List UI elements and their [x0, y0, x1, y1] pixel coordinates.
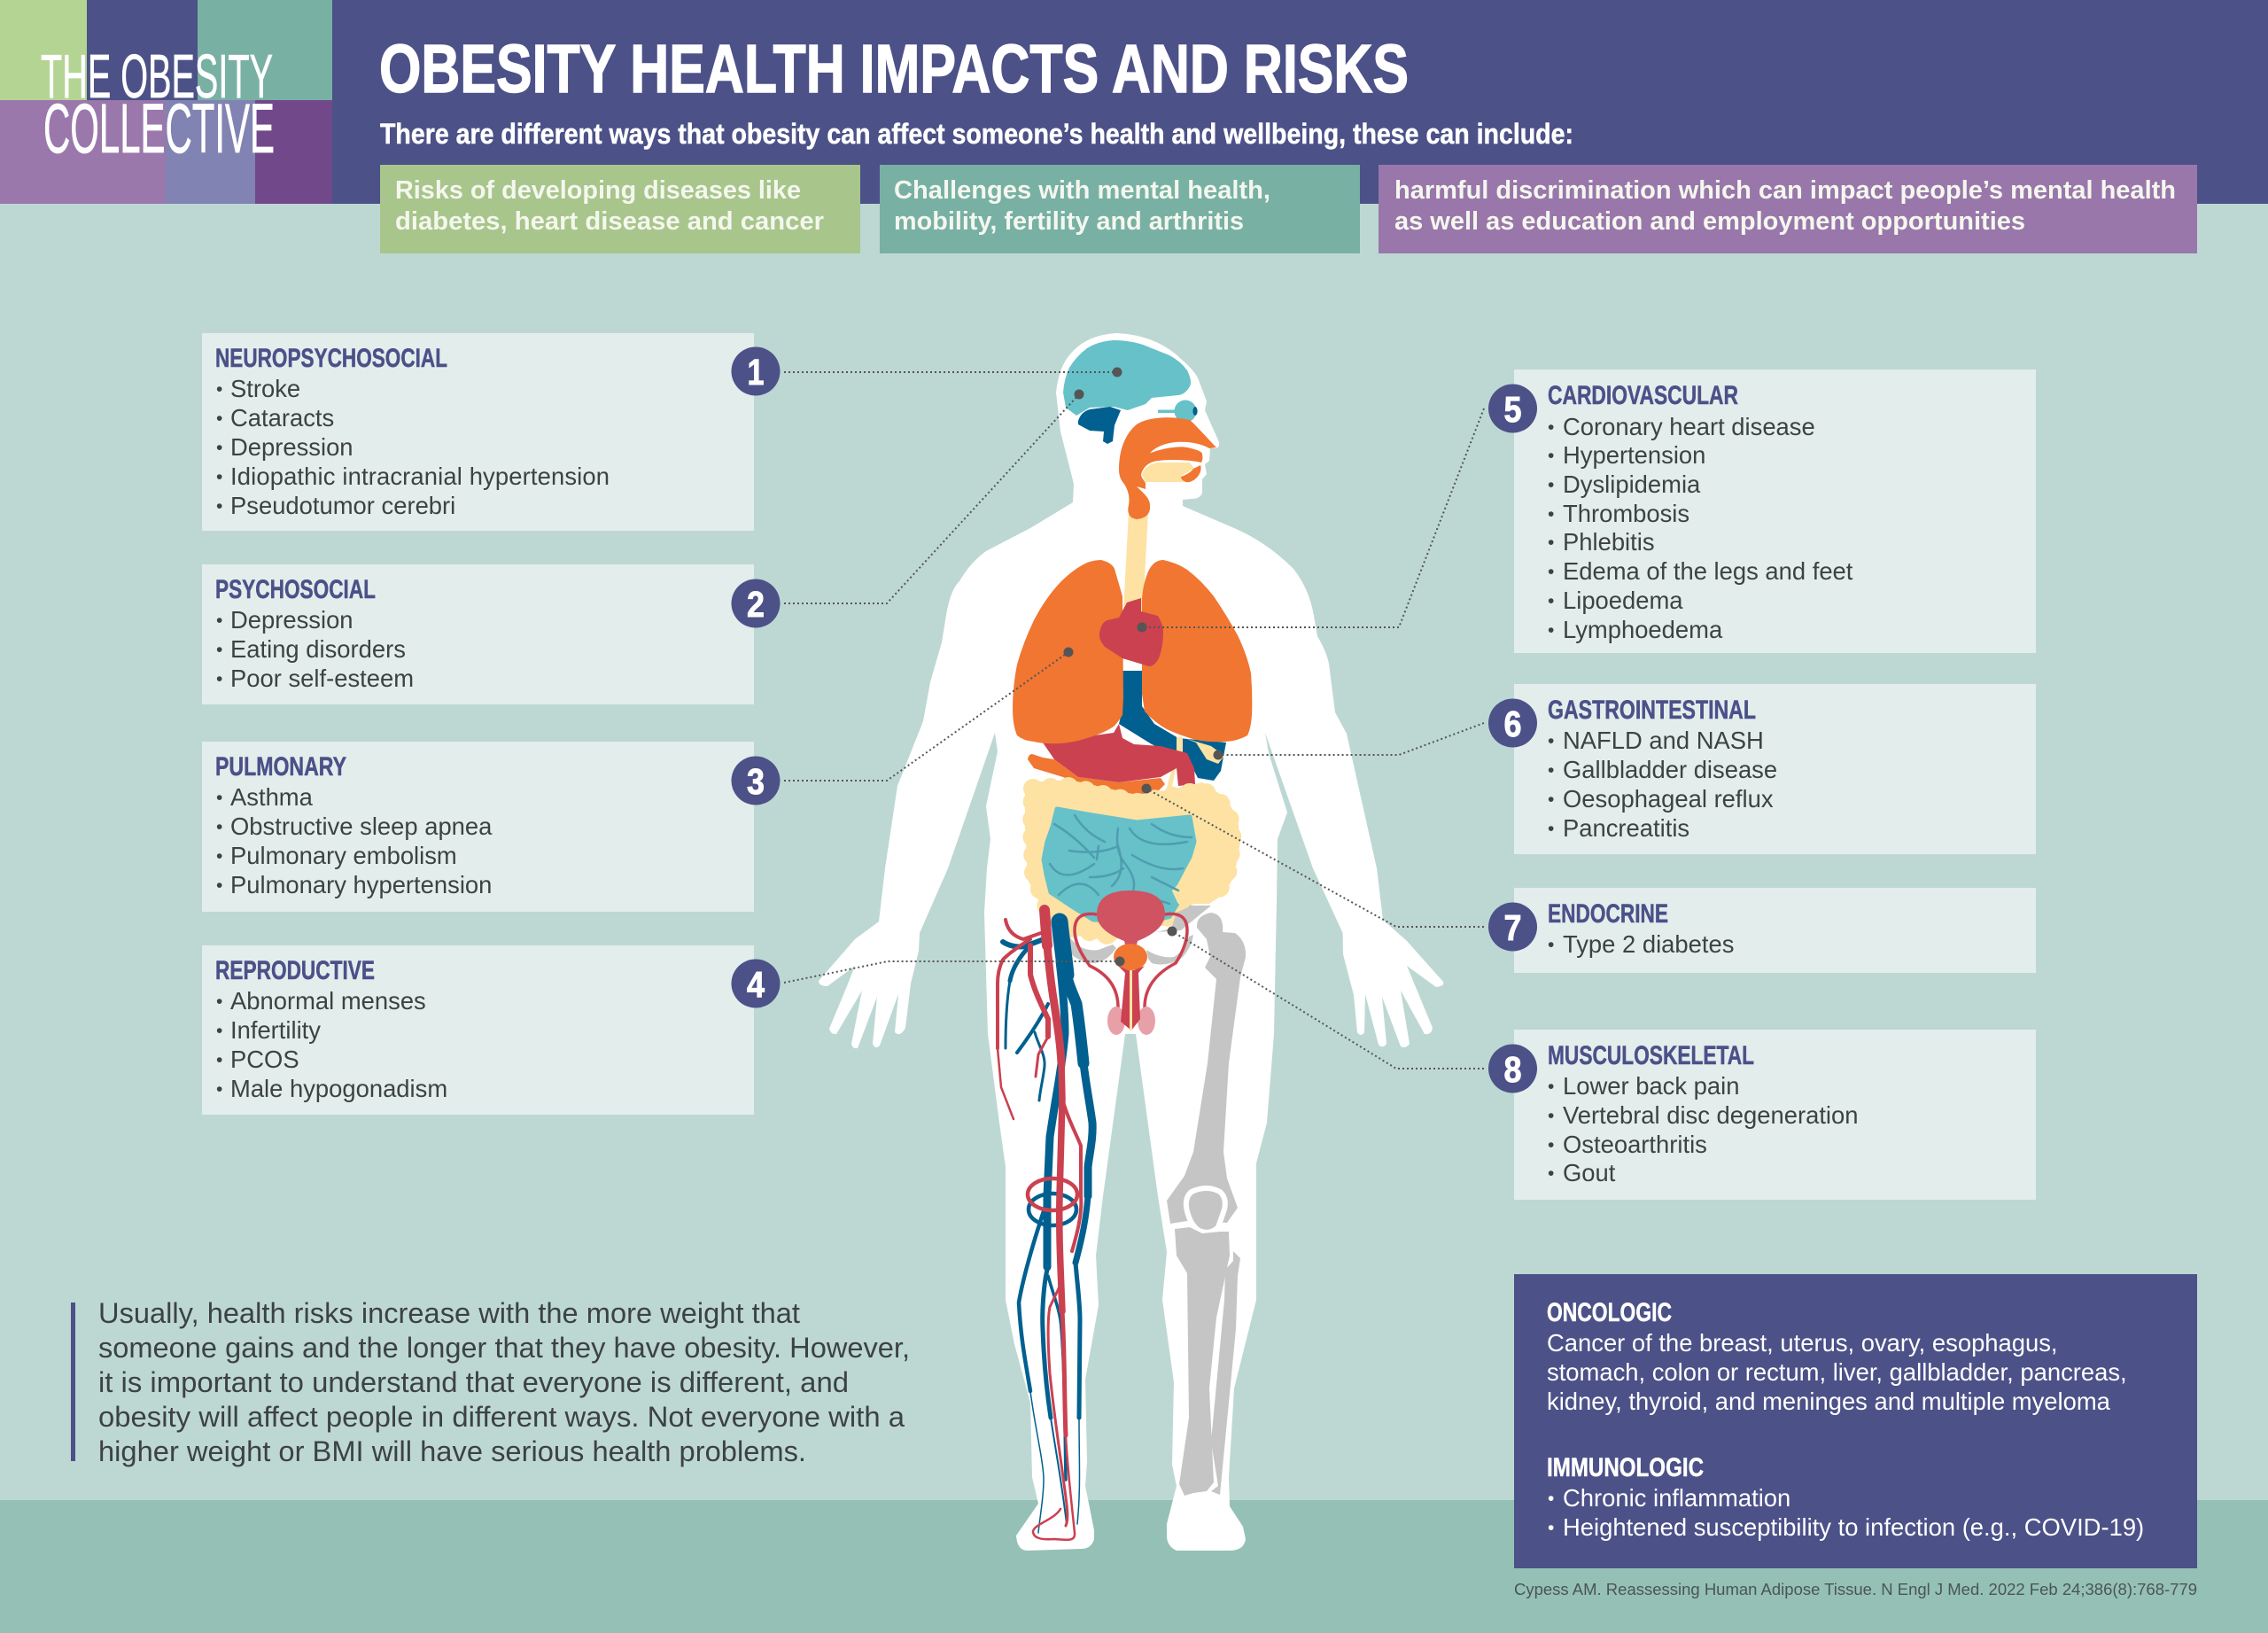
number badge 7: [1488, 902, 1537, 952]
cerebellum: [1078, 407, 1121, 444]
panel: psychosocial: Depression: [230, 606, 353, 634]
panel: oncologic and immunologic: [1514, 1274, 2197, 1568]
panel: neuropsychosocial: •: [216, 496, 222, 517]
panel: pulmonary: •: [216, 788, 222, 808]
panel: cardiovascular: •: [1548, 446, 1554, 466]
nasal and oral cavity: [1119, 417, 1216, 519]
panel: endocrine: •: [1548, 935, 1554, 955]
panel: pulmonary: •: [216, 846, 222, 867]
panel: pulmonary: •: [216, 817, 222, 837]
panel: cardiovascular: •: [1548, 591, 1554, 611]
number badge 6: 6: [1504, 704, 1522, 744]
panel: oncologic and immunologic: Chronic inflammation: [1563, 1484, 1790, 1512]
panel: neuropsychosocial: Stroke: [230, 375, 300, 402]
panel: endocrine: [1514, 888, 2036, 973]
panel: cardiovascular: •: [1548, 620, 1554, 641]
panel: gastrointestinal: Pancreatitis: [1563, 814, 1689, 842]
panel: gastrointestinal: Gallbladder disease: [1563, 756, 1777, 783]
human body figure: [819, 333, 1443, 1551]
panel: neuropsychosocial: •: [216, 379, 222, 400]
panel: reproductive: REPRODUCTIVE: [215, 956, 375, 985]
panel: oncologic and immunologic: •: [1548, 1518, 1554, 1538]
text block: health risk note: it is important to understand that everyone is different, and: [98, 1366, 849, 1398]
text block: health risk note: someone gains and the longer that they have obesity. However,: [98, 1332, 910, 1364]
panel: cardiovascular: •: [1548, 475, 1554, 495]
panel: musculoskeletal: •: [1548, 1163, 1554, 1184]
lip: [1181, 465, 1201, 482]
panel: reproductive: Male hypogonadism: [230, 1075, 447, 1102]
panel: cardiovascular: •: [1548, 562, 1554, 582]
subtitle: There are different ways that obesity can affect someone’s health and wellbeing, these can include:: [380, 118, 1573, 150]
callout: mental health and mobility: Challenges with mental health,: [894, 176, 1270, 205]
callout: discrimination: harmful discrimination which can impact people’s mental health: [1394, 176, 2176, 205]
panel: musculoskeletal: •: [1548, 1077, 1554, 1097]
number badge 2: 2: [747, 584, 765, 625]
panel: gastrointestinal: •: [1548, 789, 1554, 810]
panel: psychosocial: •: [216, 640, 222, 660]
heart: [1099, 598, 1163, 666]
panel: cardiovascular: Dyslipidemia: [1563, 470, 1701, 498]
femur: [1167, 913, 1246, 1224]
panel: cardiovascular: Thrombosis: [1563, 500, 1689, 527]
panel: reproductive: •: [216, 1050, 222, 1070]
panel: cardiovascular: CARDIOVASCULAR: [1548, 381, 1738, 410]
number badge 6: [1488, 698, 1537, 748]
panel: oncologic and immunologic: •: [1548, 1489, 1554, 1509]
panel: musculoskeletal: •: [1548, 1135, 1554, 1155]
panel: psychosocial: PSYCHOSOCIAL: [215, 575, 376, 604]
panel: oncologic and immunologic: stomach, colon or rectum, liver, gallbladder, pancreas,: [1547, 1358, 2127, 1386]
stomach: [1043, 724, 1195, 786]
header band: [332, 0, 2268, 204]
pelvis: [1061, 906, 1211, 965]
large intestine fill: [1025, 780, 1240, 942]
panel: psychosocial: Eating disorders: [230, 635, 406, 663]
leader line 1 to brain: [784, 367, 1122, 377]
eye: [1158, 400, 1198, 422]
panel: pulmonary: Asthma: [230, 783, 314, 811]
left lung: [1013, 560, 1123, 743]
number badge 5: 5: [1504, 389, 1522, 430]
panel: gastrointestinal: •: [1548, 760, 1554, 781]
panel: reproductive: [202, 945, 754, 1115]
panel: psychosocial: •: [216, 610, 222, 631]
panel: cardiovascular: Coronary heart disease: [1563, 413, 1815, 440]
body silhouette: [819, 333, 1443, 1551]
trachea: [1123, 512, 1148, 611]
leader line 3 to lung: [784, 647, 1074, 781]
panel: cardiovascular: Lymphoedema: [1563, 616, 1723, 643]
gallbladder: [1166, 737, 1224, 791]
panel: gastrointestinal: [1514, 684, 2036, 854]
panel: musculoskeletal: Vertebral disc degeneration: [1563, 1101, 1858, 1129]
panel: reproductive: •: [216, 1079, 222, 1100]
leg veins: [1003, 921, 1092, 1533]
ground band: [0, 1500, 2268, 1633]
tibia: [1175, 1227, 1230, 1496]
panel: neuropsychosocial: •: [216, 438, 222, 458]
number badge 3: [732, 757, 780, 805]
leader line 4 to prostate: [784, 957, 1125, 983]
panel: neuropsychosocial: Idiopathic intracranial hypertension: [230, 463, 610, 490]
text block: health risk note: Usually, health risks increase with the more weight that: [98, 1297, 800, 1329]
panel: neuropsychosocial: Pseudotumor cerebri: [230, 492, 455, 519]
callout: disease risks: Risks of developing diseases like: [395, 176, 801, 205]
panel: neuropsychosocial: •: [216, 408, 222, 429]
urethra: [1130, 970, 1132, 1030]
number badge 4: [732, 959, 780, 1008]
panel: neuropsychosocial: Depression: [230, 433, 353, 461]
brain: [1063, 340, 1191, 416]
large intestine bumps: [1032, 787, 1232, 935]
panel: pulmonary: Obstructive sleep apnea: [230, 813, 493, 840]
number badge 1: [732, 347, 780, 395]
patella: [1186, 1188, 1225, 1233]
panel: cardiovascular: •: [1548, 417, 1554, 438]
testes: [1107, 1007, 1155, 1035]
panel: musculoskeletal: Lower back pain: [1563, 1072, 1739, 1100]
leader line 7 to pancreas: [1141, 783, 1484, 927]
panel: gastrointestinal: Oesophageal reflux: [1563, 785, 1774, 813]
panel: endocrine: Type 2 diabetes: [1563, 930, 1734, 958]
panel: psychosocial: Poor self-esteem: [230, 665, 414, 692]
panel: cardiovascular: •: [1548, 504, 1554, 525]
small intestine: [1044, 809, 1194, 921]
panel: cardiovascular: Lipoedema: [1563, 587, 1683, 614]
panel: pulmonary: •: [216, 875, 222, 896]
leg arteries: [998, 910, 1081, 1540]
panel: neuropsychosocial: [202, 333, 754, 531]
panel: neuropsychosocial: •: [216, 467, 222, 487]
prostate: [1114, 944, 1147, 970]
panel: neuropsychosocial: Cataracts: [230, 404, 334, 432]
panel: musculoskeletal: Osteoarthritis: [1563, 1131, 1707, 1158]
logo: The Obesity Collective: [0, 0, 332, 204]
panel: gastrointestinal: •: [1548, 819, 1554, 839]
panel: musculoskeletal: •: [1548, 1106, 1554, 1126]
callout: disease risks: diabetes, heart disease and cancer: [395, 207, 824, 236]
tongue: [1142, 463, 1194, 482]
citation: Cypess AM. Reassessing Human Adipose Tissue. N Engl J Med. 2022 Feb 24;386(8):768-779: [1514, 1580, 2197, 1598]
panel: reproductive: •: [216, 991, 222, 1012]
panel: gastrointestinal: •: [1548, 731, 1554, 751]
panel: oncologic and immunologic: Heightened susceptibility to infection (e.g., COVID-19): [1563, 1513, 2144, 1541]
number badge 1: 1: [748, 352, 764, 393]
right lung: [1142, 560, 1252, 742]
text block: health risk note: higher weight or BMI will have serious health problems.: [98, 1435, 806, 1467]
panel: oncologic and immunologic: Cancer of the breast, uterus, ovary, esophagus,: [1547, 1329, 2058, 1357]
panel: cardiovascular: Hypertension: [1563, 441, 1705, 469]
vas deferens: [1075, 914, 1187, 1007]
penis: [1118, 966, 1145, 1030]
text block: health risk note: obesity will affect people in different ways. Not everyone with a: [98, 1401, 905, 1433]
number badge 5: [1488, 385, 1537, 432]
title: OBESITY HEALTH IMPACTS AND RISKS: [379, 31, 1409, 107]
liver: [1028, 754, 1165, 796]
panel: pulmonary: [202, 742, 754, 912]
panel: musculoskeletal: [1514, 1030, 2036, 1200]
number badge 4: 4: [747, 964, 765, 1005]
panel: psychosocial: [202, 564, 754, 704]
panel: endocrine: ENDOCRINE: [1548, 899, 1668, 929]
panel: reproductive: PCOS: [230, 1046, 299, 1073]
panel: pulmonary: PULMONARY: [215, 752, 346, 782]
panel: pulmonary: Pulmonary embolism: [230, 842, 457, 869]
panel: reproductive: •: [216, 1021, 222, 1041]
panel: cardiovascular: Edema of the legs and feet: [1563, 557, 1853, 585]
panel: oncologic and immunologic: ONCOLOGIC: [1547, 1298, 1672, 1327]
leader line 5 to heart: [1138, 408, 1484, 633]
panel: reproductive: Infertility: [230, 1016, 321, 1044]
panel: oncologic and immunologic: IMMUNOLOGIC: [1547, 1453, 1704, 1482]
number badge 3: 3: [747, 761, 765, 802]
panel: musculoskeletal: Gout: [1563, 1159, 1616, 1186]
vena cava and liver: [1119, 671, 1226, 781]
descending colon tail: [1174, 906, 1192, 930]
text block: health risk note: [71, 1297, 910, 1467]
panel: cardiovascular: [1514, 369, 2036, 653]
number badge 8: [1488, 1044, 1537, 1093]
logo: The Obesity Collective: COLLECTIVE: [43, 89, 275, 167]
callout: mental health and mobility: mobility, fertility and arthritis: [894, 207, 1244, 236]
number badge 7: 7: [1504, 907, 1522, 948]
leader line 6 to gallbladder: [1214, 723, 1484, 760]
panel: gastrointestinal: GASTROINTESTINAL: [1548, 696, 1756, 725]
panel: cardiovascular: Phlebitis: [1563, 528, 1655, 556]
number badge 2: [732, 579, 780, 627]
fibula: [1211, 1251, 1240, 1495]
panel: reproductive: Abnormal menses: [230, 987, 426, 1015]
panel: oncologic and immunologic: kidney, thyroid, and meninges and multiple myeloma: [1547, 1388, 2111, 1415]
panel: pulmonary: Pulmonary hypertension: [230, 871, 492, 898]
panel: psychosocial: •: [216, 669, 222, 689]
leader line 8 to hip: [1168, 927, 1484, 1069]
panel: musculoskeletal: MUSCULOSKELETAL: [1548, 1041, 1754, 1070]
callout: disease risks: [380, 165, 860, 253]
callout: discrimination: [1379, 165, 2197, 253]
callout: mental health and mobility: [880, 165, 1360, 253]
callout: discrimination: as well as education and employment opportunities: [1394, 207, 2025, 236]
panel: cardiovascular: •: [1548, 533, 1554, 553]
number badge 8: 8: [1504, 1049, 1522, 1090]
leader line 2 to brain: [784, 390, 1084, 603]
panel: gastrointestinal: NAFLD and NASH: [1563, 727, 1764, 754]
bladder: [1097, 890, 1165, 955]
logo: The Obesity Collective: THE OBESITY: [41, 42, 273, 111]
panel: neuropsychosocial: NEUROPSYCHOSOCIAL: [215, 344, 447, 373]
